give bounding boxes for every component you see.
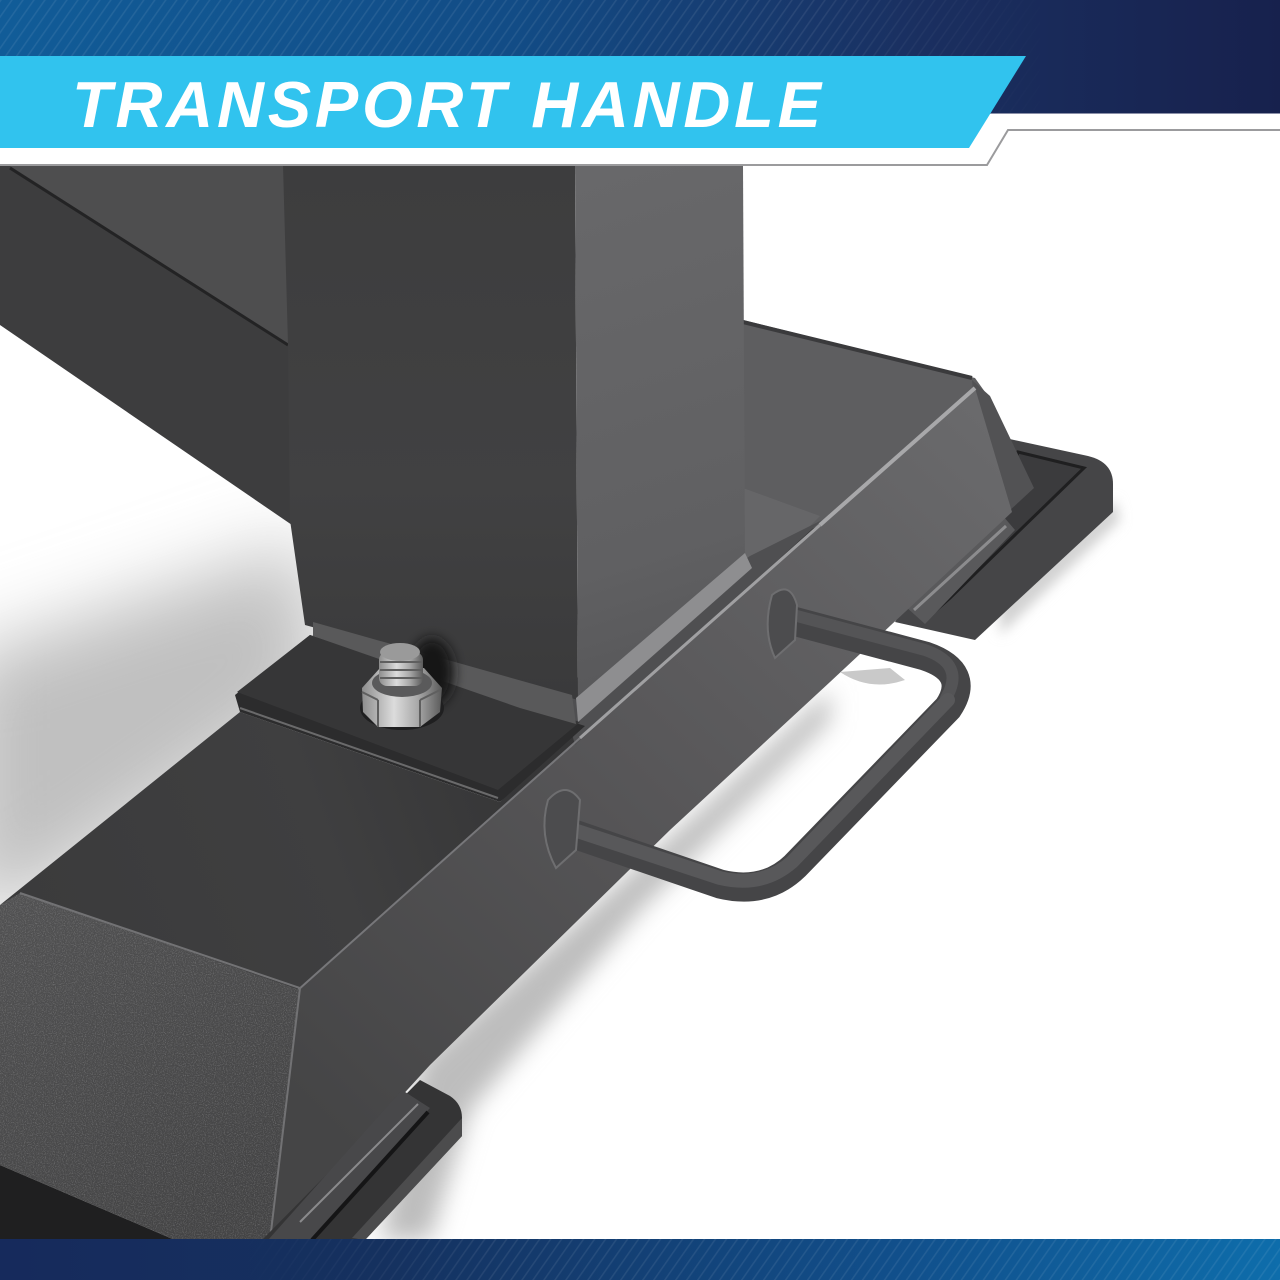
title: TRANSPORT HANDLE [72,68,823,141]
right foot pad [895,438,1113,640]
top navy band [0,0,1280,114]
rear base top face [743,320,985,578]
beam end face [0,893,300,1240]
floor shadows [0,500,1120,1240]
base beam top face [0,525,820,990]
title banner [0,56,1026,148]
wheel behind handle [840,668,905,684]
base beam side face [270,388,1012,1240]
slanted weld rear [972,380,1034,512]
handle weld collars [768,589,797,658]
upright column [283,166,745,700]
header white strip with grey outline [0,114,1280,165]
transport handle [544,589,956,887]
bottom navy band [0,1239,1280,1280]
upper diagonal brace [0,166,292,525]
strip between column weld and ridge [560,520,822,745]
front foot pad [262,1080,462,1240]
mounting plate [235,553,752,802]
hex bolt [360,643,444,730]
product photo: bench base and transport handle [0,166,1120,1240]
ridge weld line [298,388,975,990]
